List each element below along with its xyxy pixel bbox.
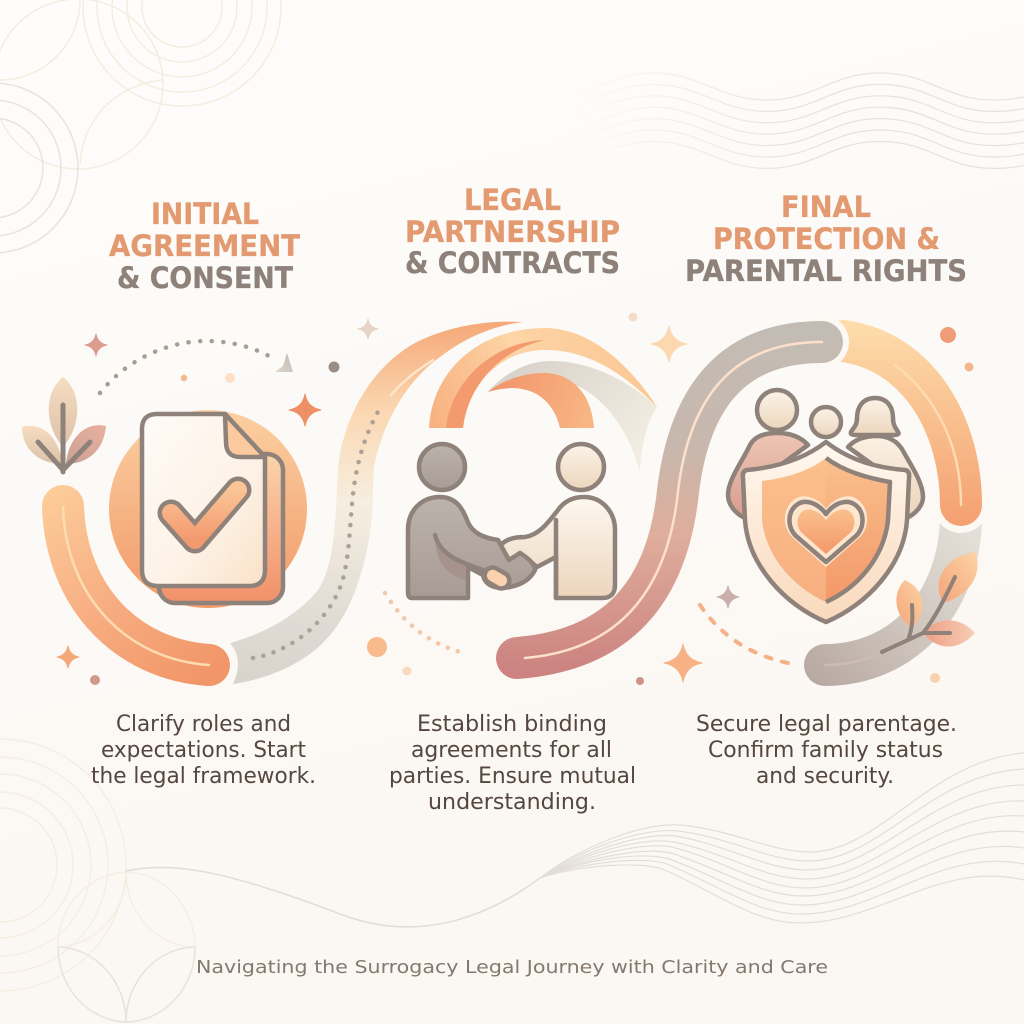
text: step two description: parties. Ensure mutual bbox=[389, 764, 636, 789]
checkmark bbox=[171, 490, 238, 540]
heart outline bbox=[789, 502, 863, 562]
decorative dots bbox=[90, 312, 974, 685]
mother head bbox=[851, 398, 898, 435]
heading: legal partnership and contracts: LEGAL bbox=[464, 183, 561, 217]
front page bbox=[142, 414, 265, 586]
left person body and arm bbox=[408, 497, 535, 598]
text: step two description: agreements for all bbox=[411, 738, 612, 763]
text: step two description: understanding. bbox=[428, 790, 596, 815]
shield inner left half bbox=[762, 458, 826, 602]
heading: legal partnership and contracts bbox=[405, 183, 620, 280]
heading: initial agreement and consent bbox=[109, 197, 300, 295]
heading: initial agreement and consent: & CONSENT bbox=[117, 261, 293, 295]
background: bottom-left circles bbox=[0, 739, 195, 1022]
heading: final protection and parental rights bbox=[685, 190, 967, 288]
icon: plant sprig bbox=[22, 377, 106, 472]
right person arm divider bbox=[554, 520, 558, 598]
heading: final protection and parental rights: PARENTAL RIGHTS bbox=[685, 254, 967, 288]
shield inner border bbox=[826, 458, 890, 602]
background: bottom flowing line and wave bundle bbox=[126, 753, 1024, 927]
shield inner right half bbox=[826, 458, 890, 602]
dotted path on connector bbox=[253, 408, 380, 658]
heading: initial agreement and consent: INITIAL bbox=[151, 197, 259, 231]
right person body and arm bbox=[497, 497, 615, 598]
text: step one description: Clarify roles and bbox=[116, 712, 291, 737]
ribbon: step one orange arc bbox=[63, 506, 209, 665]
ribbon: gray to peach connector between steps one and two bbox=[230, 322, 523, 684]
back page bbox=[159, 454, 283, 603]
ribbon: crescent arches above handshake bbox=[429, 328, 657, 472]
ribbon: central rose to gray S-curve bbox=[517, 342, 822, 658]
right person head bbox=[558, 444, 604, 490]
footer tagline: Navigating the Surrogacy Legal Journey with Clarity and Care bbox=[196, 957, 828, 978]
text: step two description: Establish binding bbox=[417, 712, 607, 737]
heart ring bbox=[785, 496, 867, 567]
father head bbox=[757, 390, 797, 430]
heading: final protection and parental rights: PROTECTION & bbox=[713, 222, 940, 256]
thumb bbox=[482, 565, 512, 591]
text: step one description: the legal framework. bbox=[91, 764, 316, 789]
icon: lower right branch bbox=[882, 552, 978, 652]
decorative sparkles bbox=[57, 319, 739, 682]
page fold bbox=[225, 414, 265, 457]
icon: documents with checkmark bbox=[109, 410, 307, 608]
heading: final protection and parental rights: FINAL bbox=[781, 190, 871, 224]
connector highlight bbox=[391, 360, 433, 395]
heading: legal partnership and contracts: & CONTRACTS bbox=[405, 246, 620, 280]
text: step three description bbox=[696, 712, 957, 789]
left person head bbox=[419, 444, 465, 490]
heart core bbox=[798, 509, 854, 554]
child head bbox=[811, 407, 841, 437]
left torso shading bbox=[435, 535, 466, 580]
text: step one description bbox=[91, 712, 316, 789]
ribbon: step three orange upper arc bbox=[843, 341, 961, 505]
background: top-left circles bbox=[0, 0, 281, 253]
dashed curve near shield bbox=[700, 605, 788, 663]
father body bbox=[728, 433, 808, 518]
text: step two description bbox=[389, 712, 636, 815]
text: step three description: Secure legal parentage. bbox=[696, 712, 957, 737]
icon: family with shield bbox=[728, 390, 923, 622]
dotted curve below handshake bbox=[385, 593, 468, 654]
dotted arrow above document bbox=[100, 341, 293, 393]
text: step three description: Confirm family status bbox=[708, 738, 943, 763]
peach disc bbox=[109, 410, 307, 608]
shield outer bbox=[743, 442, 909, 622]
text: step three description: and security. bbox=[756, 764, 894, 789]
left arm inner line bbox=[435, 535, 483, 570]
background: top-right waves bbox=[570, 73, 1024, 168]
ribbon: step three gray lower arc bbox=[825, 515, 961, 665]
text: step one description: expectations. Start bbox=[101, 738, 306, 763]
icon: handshake bbox=[408, 444, 615, 598]
heading: initial agreement and consent: AGREEMENT bbox=[109, 229, 300, 263]
heading: legal partnership and contracts: PARTNERSHIP bbox=[405, 215, 620, 249]
mother body bbox=[848, 436, 923, 518]
